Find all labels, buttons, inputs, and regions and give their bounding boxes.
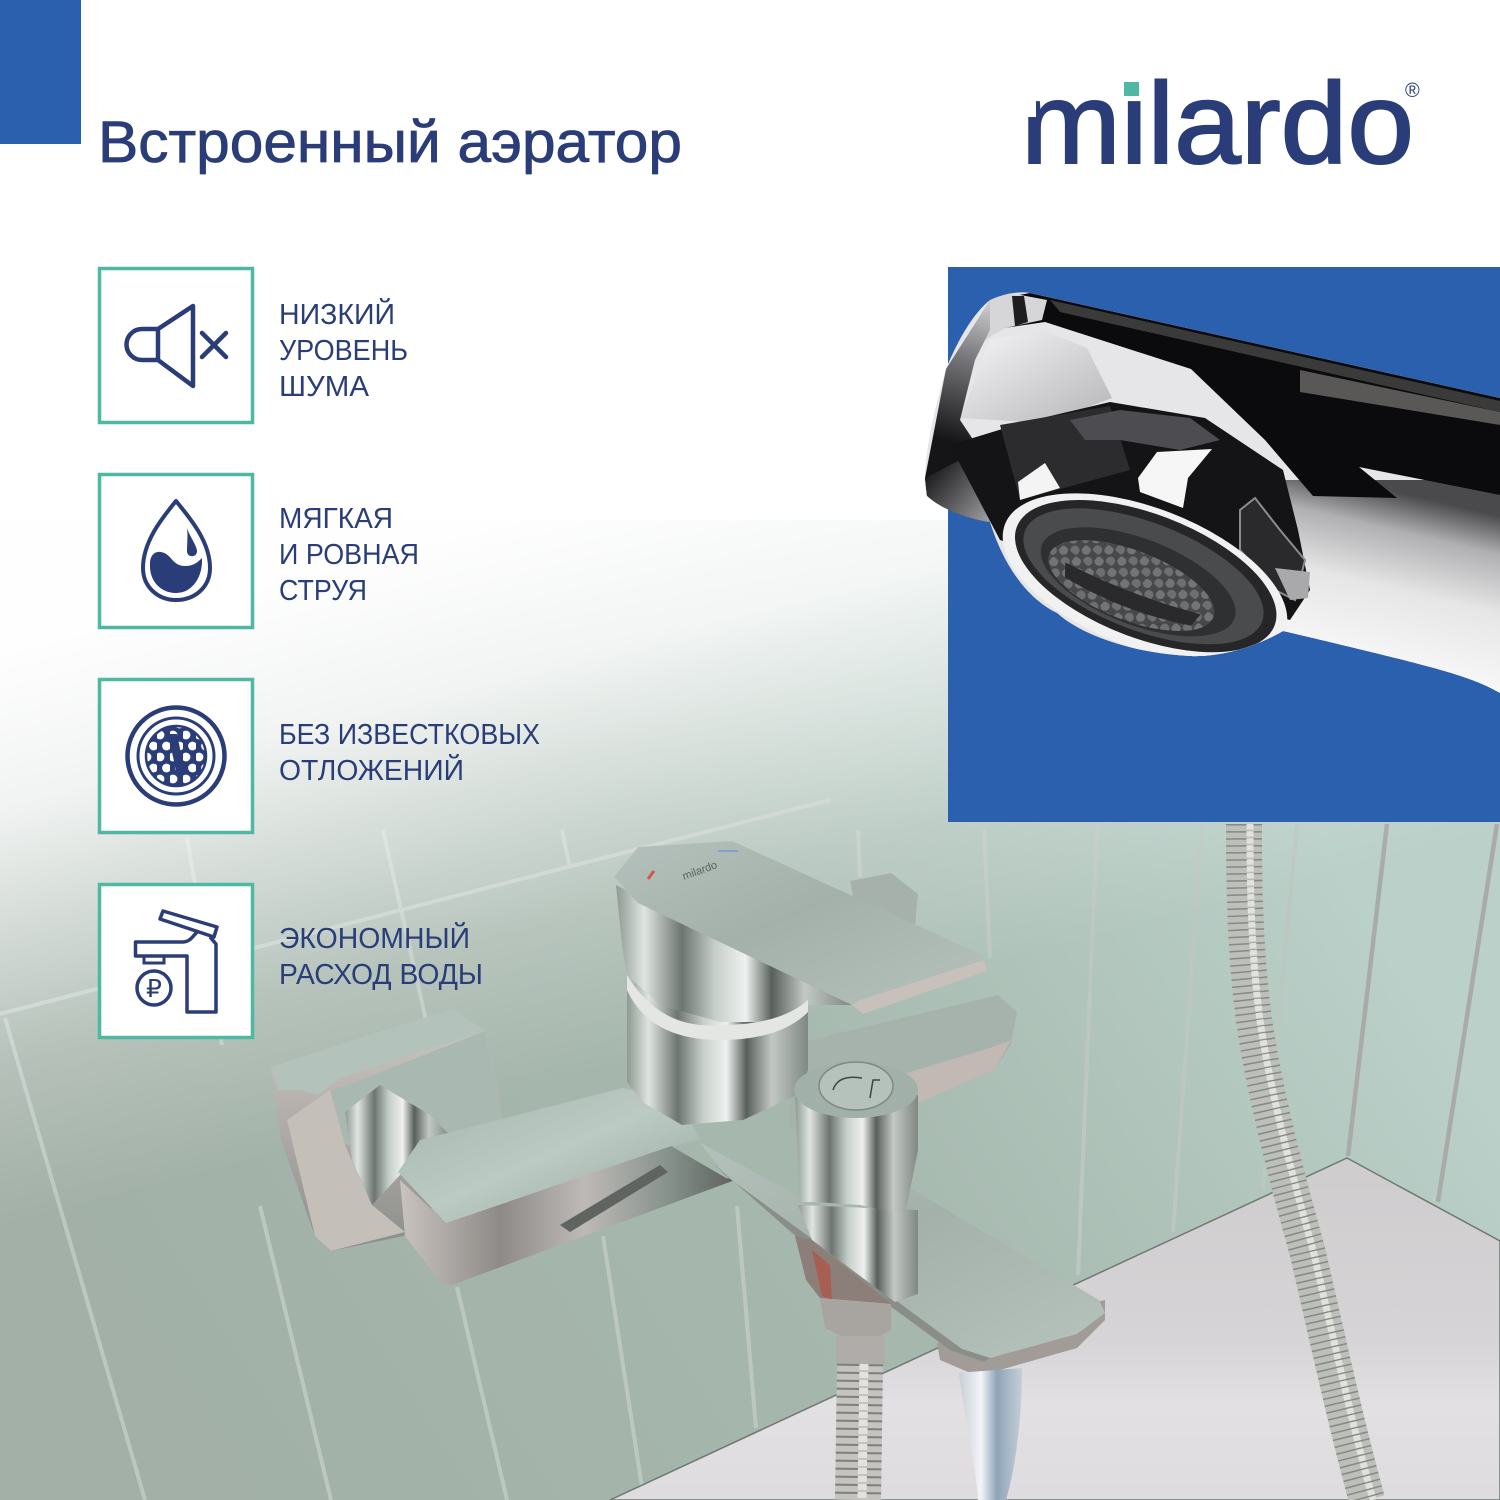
label: low noise: УРОВЕНЬ [279, 335, 408, 367]
main column upper [616, 885, 852, 1022]
white fade over wall [0, 520, 1500, 1280]
panel: aerator closeup [900, 267, 1500, 822]
water stream [959, 1368, 1022, 1500]
bathtub [610, 1158, 1500, 1500]
background: tiled bathroom wall [0, 520, 1500, 1500]
hose connector [820, 1298, 891, 1336]
feature: low noise [100, 268, 408, 422]
icon box: aerator mesh [100, 680, 252, 832]
horizontal arm front face [400, 1146, 735, 1285]
neck under spout [795, 1236, 891, 1304]
accent: top left blue block [0, 0, 81, 144]
chrome collar [627, 975, 808, 1040]
spout lip [937, 1300, 1105, 1372]
wall escutcheon plate [271, 1009, 504, 1251]
main column lower [627, 984, 808, 1125]
title: Встроенный аэратор [98, 110, 682, 175]
label: low noise: ШУМА [279, 371, 370, 403]
feature: soft even stream [100, 474, 419, 628]
label: economical water use [279, 921, 483, 991]
brand logo: milardo [1021, 60, 1414, 188]
bathtub shower hose [1244, 824, 1373, 1500]
faucet: mixer on the wall [271, 841, 1105, 1500]
rear mount behind lever [850, 873, 918, 930]
red reflection on spout neck [812, 1250, 832, 1300]
small brand on lever: milardo [681, 859, 719, 883]
icon box: faucet with ruble coin: ₽ [146, 975, 162, 1003]
spout plate top [699, 1142, 1105, 1358]
horizontal arm top face [398, 1088, 700, 1223]
red hot mark [648, 871, 654, 879]
label: economical water use: РАСХОД ВОДЫ [279, 959, 483, 991]
label: low noise [279, 297, 408, 403]
feature: no limescale [100, 680, 540, 832]
label: soft even stream: СТРУЯ [279, 575, 367, 607]
handle lever lip [852, 960, 987, 1014]
icon box: water drop [100, 474, 252, 628]
blue cold mark [718, 850, 738, 852]
feature: economical water use [100, 884, 483, 1038]
aerator rim and mesh [1002, 493, 1288, 656]
label: economical water use: ЭКОНОМНЫЙ [279, 921, 470, 955]
knob reflection on the spout [798, 1205, 918, 1302]
label: no limescale: БЕЗ ИЗВЕСТКОВЫХ [279, 719, 540, 751]
label: soft even stream: МЯГКАЯ [279, 503, 393, 535]
reflection streak on arm [560, 1165, 668, 1232]
label: soft even stream: И РОВНАЯ [279, 539, 419, 571]
hose neck [836, 1336, 885, 1364]
label: no limescale [279, 719, 540, 787]
spout lower-left edge [715, 1165, 990, 1362]
label: low noise: НИЗКИЙ [279, 297, 395, 331]
icon box: faucet with ruble coin [100, 884, 252, 1038]
handle lever top [614, 841, 987, 1014]
diverter knob [794, 1062, 918, 1215]
bath hose [858, 1364, 864, 1500]
right body arm [790, 995, 1017, 1130]
label: no limescale: ОТЛОЖЕНИЙ [279, 753, 464, 787]
icon box: speaker muted [100, 268, 252, 422]
hex connector nut [345, 1085, 450, 1205]
label: soft even stream [279, 503, 419, 607]
brand logo: ® [1405, 80, 1420, 102]
